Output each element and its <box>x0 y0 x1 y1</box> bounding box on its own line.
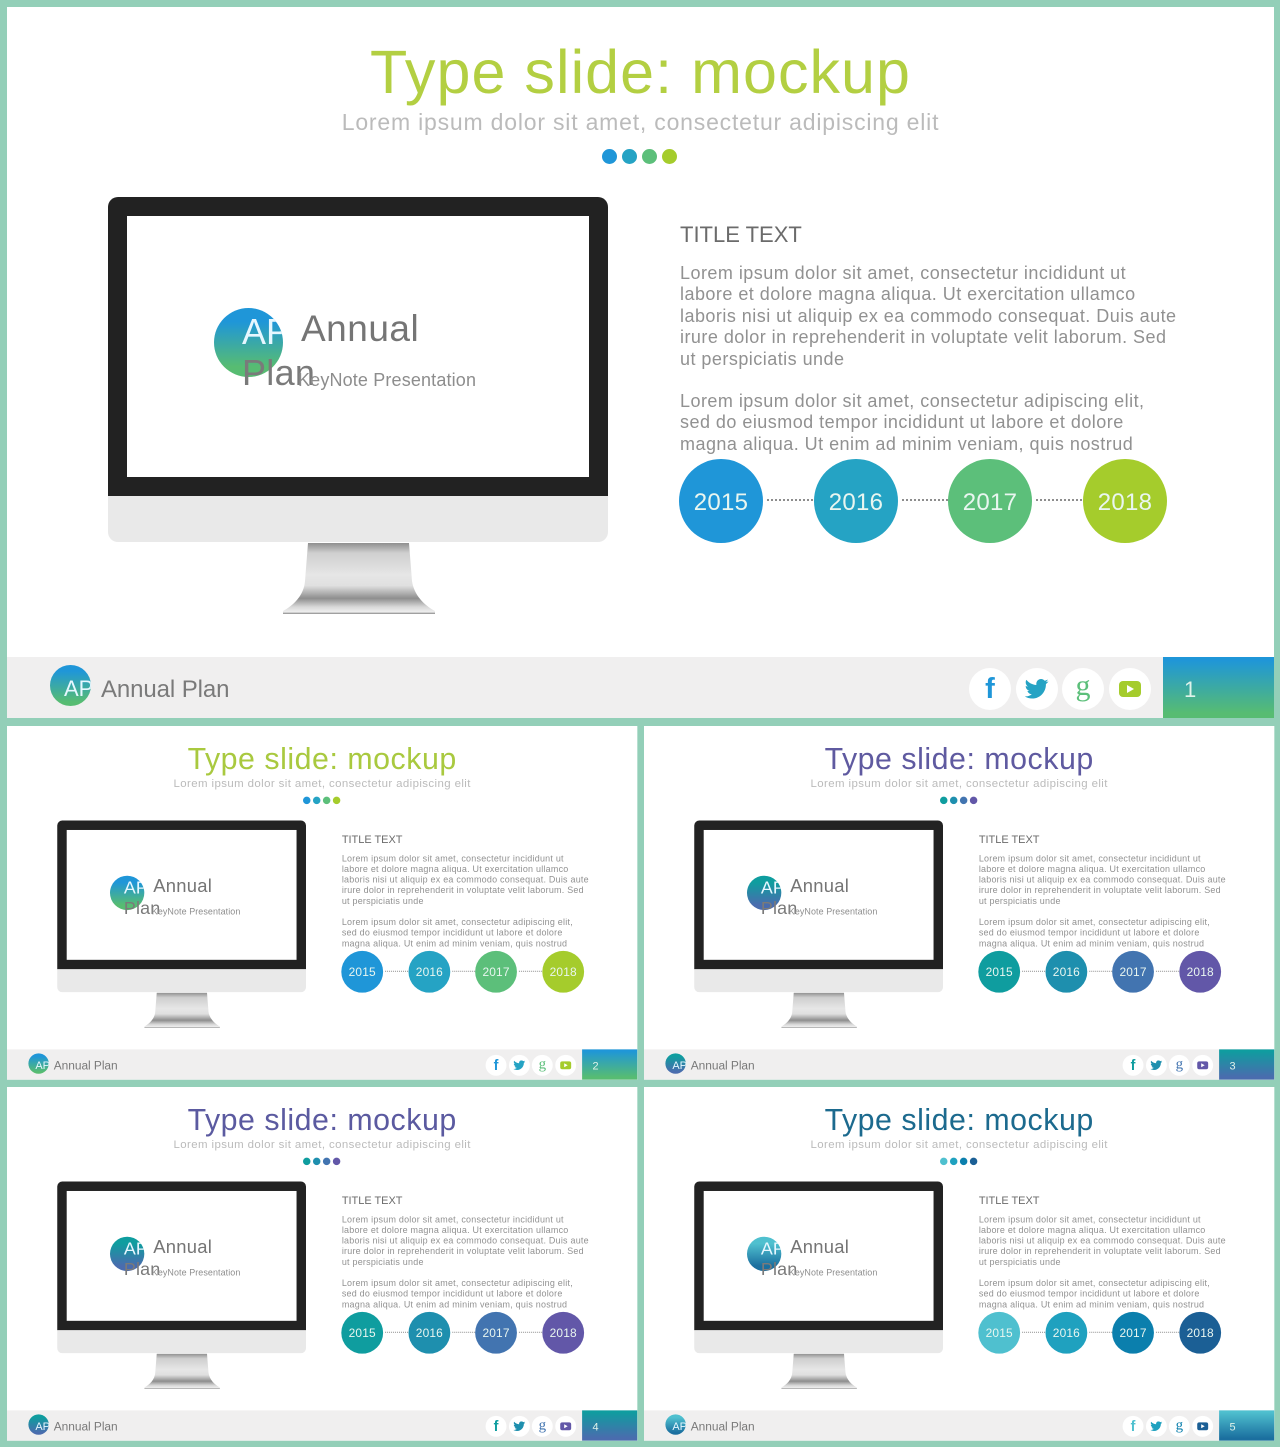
year 2016: 2016 <box>829 489 883 516</box>
panel: small slide 2 <box>6 726 637 1079</box>
page number block <box>582 1049 637 1079</box>
paragraph 1: irure dolor in reprehenderit in voluptate velit laborum. Sed <box>341 885 583 895</box>
panel: large slide 1 <box>7 7 1274 718</box>
footer name: Annual Plan <box>101 676 229 703</box>
paragraph 1 <box>341 1214 588 1267</box>
paragraph 2 <box>978 1278 1209 1310</box>
text heading: TITLE TEXT <box>341 832 402 845</box>
screen caption: KeyNote Presentation <box>298 370 476 390</box>
year 2016 <box>1045 950 1087 992</box>
year 2018 <box>1179 1311 1221 1353</box>
subtitle: Lorem ipsum dolor sit amet, consectetur adipiscing elit <box>173 776 470 789</box>
paragraph 1: labore et dolore magna aliqua. Ut exercitation ullamco <box>978 864 1205 873</box>
year 2018 <box>1179 950 1221 992</box>
monitor screen <box>127 216 589 477</box>
page number block: 3 <box>1229 1059 1235 1071</box>
icon: google: g <box>1076 669 1090 702</box>
year 2016 <box>408 950 450 992</box>
paragraph 1: Lorem ipsum dolor sit amet, consectetur incididunt ut <box>978 853 1200 863</box>
year 2015: 2015 <box>348 965 375 979</box>
paragraph 2: magna aliqua. Ut enim ad minim veniam, quis nostrud <box>341 1299 567 1309</box>
icon: google <box>1062 668 1104 710</box>
year 2018: 2018 <box>1098 489 1152 516</box>
footer name: Annual Plan <box>53 1058 117 1072</box>
footer logo <box>665 1414 685 1434</box>
paragraph 2: Lorem ipsum dolor sit amet, consectetur adipiscing elit, <box>341 917 572 926</box>
title: Type slide: mockup <box>187 741 456 775</box>
year 2016 <box>814 459 898 543</box>
year 2017 <box>475 950 516 992</box>
screen caption: KeyNote Presentation <box>151 906 240 916</box>
year 2017: 2017 <box>482 1326 509 1340</box>
paragraph 2: sed do eiusmod tempor incididunt ut labore et dolore <box>341 1288 562 1298</box>
icon: twitter <box>508 1415 529 1436</box>
logo word Annual: Annual <box>790 875 849 896</box>
logo word Annual: Annual <box>790 1236 849 1257</box>
paragraph 1: ut perspiciatis unde <box>680 349 844 369</box>
four colored dots <box>303 796 340 804</box>
paragraph 1: irure dolor in reprehenderit in voluptate velit laborum. Sed <box>341 1246 583 1256</box>
year 2017 <box>1112 950 1153 992</box>
panel: small slide 4 <box>6 1086 637 1440</box>
footer bar <box>7 657 1274 718</box>
monitor mockup <box>108 197 608 614</box>
year 2016 <box>1045 1311 1087 1353</box>
paragraph 1: labore et dolore magna aliqua. Ut exercitation ullamco <box>680 284 1136 304</box>
paragraph 2: sed do eiusmod tempor incididunt ut labore et dolore <box>978 927 1199 937</box>
logo circle <box>109 1236 144 1271</box>
icon: google: g <box>1175 1055 1183 1071</box>
year 2015 <box>341 1311 383 1353</box>
paragraph 2: magna aliqua. Ut enim ad minim veniam, quis nostrud <box>978 1299 1204 1309</box>
paragraph 1: Lorem ipsum dolor sit amet, consectetur incididunt ut <box>341 1214 563 1224</box>
footer bar <box>6 1410 637 1440</box>
year 2018: 2018 <box>1186 965 1213 979</box>
year 2017 <box>948 459 1032 543</box>
footer logo <box>50 665 91 706</box>
title: Type slide: mockup <box>824 1102 1093 1136</box>
logo circle <box>109 875 144 910</box>
icon: youtube <box>1192 1415 1213 1436</box>
footer bar <box>644 1049 1274 1079</box>
page number block: 5 <box>1229 1420 1235 1432</box>
paragraph 1 <box>978 1214 1226 1267</box>
icon: youtube <box>1192 1054 1213 1075</box>
icon: google <box>1168 1054 1189 1075</box>
paragraph 1: ut perspiciatis unde <box>341 895 423 905</box>
logo word Annual: Annual <box>153 875 212 896</box>
year 2017: 2017 <box>1119 1326 1146 1340</box>
footer name: Annual Plan <box>690 1058 754 1072</box>
screen caption: KeyNote Presentation <box>788 1267 877 1277</box>
logo circle <box>746 1236 781 1271</box>
subtitle: Lorem ipsum dolor sit amet, consectetur adipiscing elit <box>810 1137 1107 1150</box>
monitor stand <box>780 1353 857 1388</box>
page number block: 2 <box>592 1059 598 1071</box>
title: Type slide: mockup <box>824 741 1093 775</box>
icon: google <box>531 1415 552 1436</box>
year 2018 <box>542 950 584 992</box>
logo circle <box>746 875 781 910</box>
paragraph 1 <box>341 853 588 906</box>
footer name: Annual Plan <box>690 1419 754 1433</box>
paragraph 2: magna aliqua. Ut enim ad minim veniam, quis nostrud <box>341 938 567 948</box>
paragraph 2: Lorem ipsum dolor sit amet, consectetur adipiscing elit, <box>978 1278 1209 1287</box>
icon: google: g <box>1175 1416 1183 1432</box>
logo word Plan: Plan <box>123 897 160 918</box>
year 2015 <box>978 1311 1020 1353</box>
paragraph 2: magna aliqua. Ut enim ad minim veniam, quis nostrud <box>680 434 1133 454</box>
monitor stand <box>143 1353 220 1388</box>
logo word Plan: Plan <box>123 1258 160 1279</box>
paragraph 1: Lorem ipsum dolor sit amet, consectetur incididunt ut <box>341 853 563 863</box>
year 2017 <box>1112 1311 1153 1353</box>
monitor screen <box>703 829 933 959</box>
year 2017: 2017 <box>963 489 1017 516</box>
icon: facebook: f <box>493 1057 498 1073</box>
icon: facebook <box>485 1054 506 1075</box>
title: Type slide: mockup <box>187 1102 456 1136</box>
page number block <box>1219 1410 1274 1440</box>
icon: twitter <box>1145 1415 1166 1436</box>
page number block <box>582 1410 637 1440</box>
screen caption: KeyNote Presentation <box>151 1267 240 1277</box>
icon: facebook: f <box>1130 1418 1135 1434</box>
page number block: 4 <box>592 1420 598 1432</box>
footer logo <box>28 1053 48 1073</box>
text heading: TITLE TEXT <box>978 832 1039 845</box>
icon: facebook <box>969 668 1011 710</box>
paragraph 2 <box>978 917 1209 948</box>
subtitle: Lorem ipsum dolor sit amet, consectetur adipiscing elit <box>173 1137 470 1150</box>
paragraph 1: Lorem ipsum dolor sit amet, consectetur incididunt ut <box>978 1214 1200 1224</box>
paragraph 1: laboris nisi ut aliquip ex ea commodo consequat. Duis aute <box>680 306 1177 326</box>
paragraph 2: Lorem ipsum dolor sit amet, consectetur adipiscing elit, <box>341 1278 572 1287</box>
page number block <box>1163 657 1274 718</box>
four colored dots <box>940 1158 978 1166</box>
screen caption: KeyNote Presentation <box>788 906 877 916</box>
icon: google: g <box>538 1416 546 1432</box>
paragraph 2 <box>341 1278 572 1310</box>
monitor mockup <box>694 820 943 1028</box>
text heading: TITLE TEXT <box>978 1193 1039 1206</box>
icon: twitter <box>1016 668 1058 710</box>
panel: small slide 5 <box>644 1086 1274 1440</box>
year 2018 <box>542 1311 584 1353</box>
icon: facebook <box>1122 1415 1143 1436</box>
panel: small slide 3 <box>644 726 1274 1079</box>
icon: facebook: f <box>1130 1057 1135 1073</box>
paragraph 2 <box>680 391 1145 454</box>
monitor screen <box>66 829 296 959</box>
monitor stand <box>143 992 220 1027</box>
paragraph 2: sed do eiusmod tempor incididunt ut labore et dolore <box>341 927 562 937</box>
icon: youtube <box>1109 668 1151 710</box>
icon: google: g <box>538 1055 546 1071</box>
year 2018: 2018 <box>549 1326 576 1340</box>
footer logo <box>28 1414 48 1434</box>
icon: google <box>531 1054 552 1075</box>
paragraph 1: irure dolor in reprehenderit in voluptate velit laborum. Sed <box>680 327 1166 347</box>
paragraph 1: ut perspiciatis unde <box>978 895 1060 905</box>
footer logo <box>665 1053 685 1073</box>
paragraph 2: sed do eiusmod tempor incididunt ut labore et dolore <box>978 1288 1199 1298</box>
year 2018: 2018 <box>549 965 576 979</box>
logo word Annual: Annual <box>153 1236 212 1257</box>
page number block <box>1219 1049 1274 1079</box>
year 2018 <box>1083 459 1167 543</box>
year 2015 <box>978 950 1020 992</box>
year 2017 <box>475 1311 516 1353</box>
paragraph 1: ut perspiciatis unde <box>341 1256 423 1266</box>
icon: facebook: f <box>985 673 995 705</box>
year 2017: 2017 <box>482 965 509 979</box>
paragraph 1 <box>680 263 1177 369</box>
icon: google <box>1168 1415 1189 1436</box>
paragraph 1: laboris nisi ut aliquip ex ea commodo consequat. Duis aute <box>978 874 1225 884</box>
paragraph 1: laboris nisi ut aliquip ex ea commodo consequat. Duis aute <box>978 1235 1225 1245</box>
icon: facebook: f <box>493 1418 498 1434</box>
year 2016 <box>408 1311 450 1353</box>
footer name: Annual Plan <box>53 1419 117 1433</box>
logo word Annual: Annual <box>301 308 419 349</box>
paragraph 1 <box>978 853 1226 906</box>
year 2015: 2015 <box>985 965 1012 979</box>
year 2015 <box>679 459 763 543</box>
paragraph 2: sed do eiusmod tempor incididunt ut labore et dolore <box>680 412 1124 432</box>
year 2016: 2016 <box>415 965 442 979</box>
paragraph 1: irure dolor in reprehenderit in voluptate velit laborum. Sed <box>978 1246 1220 1256</box>
paragraph 1: ut perspiciatis unde <box>978 1256 1060 1266</box>
year 2015: 2015 <box>694 489 748 516</box>
icon: twitter <box>508 1054 529 1075</box>
monitor stand <box>780 992 857 1027</box>
year 2017: 2017 <box>1119 965 1146 979</box>
paragraph 2: magna aliqua. Ut enim ad minim veniam, quis nostrud <box>978 938 1204 948</box>
paragraph 1: laboris nisi ut aliquip ex ea commodo consequat. Duis aute <box>341 874 588 884</box>
monitor screen <box>66 1190 296 1320</box>
year 2015: 2015 <box>985 1326 1012 1340</box>
subtitle: Lorem ipsum dolor sit amet, consectetur adipiscing elit <box>342 109 939 135</box>
paragraph 1: Lorem ipsum dolor sit amet, consectetur incididunt ut <box>680 263 1126 283</box>
paragraph 1: irure dolor in reprehenderit in voluptate velit laborum. Sed <box>978 885 1220 895</box>
paragraph 2: Lorem ipsum dolor sit amet, consectetur adipiscing elit, <box>978 917 1209 926</box>
year 2015: 2015 <box>348 1326 375 1340</box>
subtitle: Lorem ipsum dolor sit amet, consectetur adipiscing elit <box>810 776 1107 789</box>
icon: youtube <box>555 1415 576 1436</box>
paragraph 2 <box>341 917 572 948</box>
four colored dots <box>940 796 978 804</box>
text heading: TITLE TEXT <box>680 222 802 247</box>
icon: facebook <box>1122 1054 1143 1075</box>
year 2016: 2016 <box>415 1326 442 1340</box>
footer bar <box>644 1410 1274 1440</box>
monitor mockup <box>694 1182 943 1389</box>
logo word Plan: Plan <box>760 897 797 918</box>
paragraph 1: labore et dolore magna aliqua. Ut exercitation ullamco <box>341 864 568 873</box>
monitor stand <box>282 543 436 614</box>
paragraph 2: Lorem ipsum dolor sit amet, consectetur adipiscing elit, <box>680 391 1145 411</box>
year 2018: 2018 <box>1186 1326 1213 1340</box>
monitor mockup <box>57 820 306 1028</box>
four colored dots <box>602 149 677 164</box>
logo word Plan: Plan <box>242 352 315 393</box>
monitor mockup <box>57 1182 306 1389</box>
logo circle <box>214 308 283 377</box>
monitor screen <box>703 1190 933 1320</box>
paragraph 1: labore et dolore magna aliqua. Ut exercitation ullamco <box>978 1225 1205 1234</box>
paragraph 1: labore et dolore magna aliqua. Ut exercitation ullamco <box>341 1225 568 1234</box>
text heading: TITLE TEXT <box>341 1193 402 1206</box>
icon: youtube <box>555 1054 576 1075</box>
title: Type slide: mockup <box>370 38 911 106</box>
icon: facebook <box>485 1415 506 1436</box>
four colored dots <box>303 1158 340 1166</box>
logo word Plan: Plan <box>760 1258 797 1279</box>
year 2016: 2016 <box>1052 965 1079 979</box>
footer bar <box>6 1049 637 1079</box>
paragraph 1: laboris nisi ut aliquip ex ea commodo consequat. Duis aute <box>341 1235 588 1245</box>
year 2016: 2016 <box>1052 1326 1079 1340</box>
year 2015 <box>341 950 383 992</box>
page number block: 1 <box>1184 677 1196 702</box>
icon: twitter <box>1145 1054 1166 1075</box>
